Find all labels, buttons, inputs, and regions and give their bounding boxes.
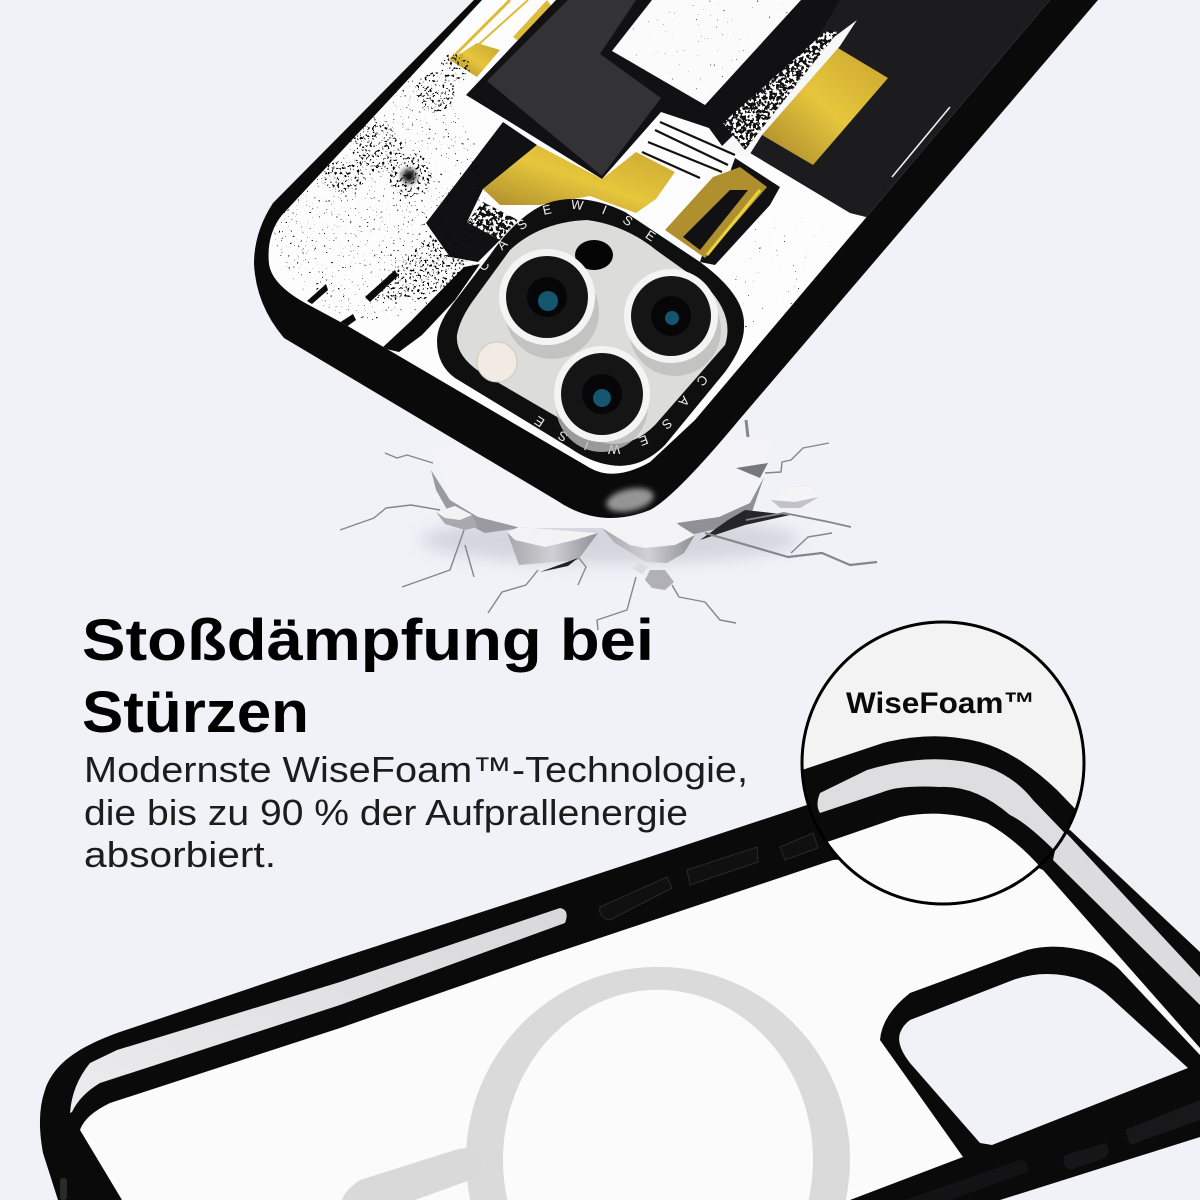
strip left	[70, 908, 567, 1113]
case bumper	[254, 0, 1098, 518]
white stroke	[718, 20, 857, 157]
gold patch top left	[450, 0, 553, 77]
camera cut-out window	[899, 974, 1188, 1145]
hatched brush strokes	[642, 122, 735, 178]
heading	[82, 608, 654, 745]
dark grey block	[487, 0, 661, 176]
heading: Stürzen	[82, 680, 309, 745]
camera plateau	[457, 220, 728, 444]
lens right	[624, 269, 721, 376]
circle outline	[802, 622, 1084, 904]
dense ink streak zone	[375, 235, 474, 300]
black panel upper right	[750, 0, 1060, 218]
body text: Modernste WiseFoam™-Technologie,	[84, 749, 748, 790]
cracked floor impact	[340, 420, 877, 630]
thin white scratch on black panel	[892, 107, 950, 177]
bright yellow stroke	[707, 190, 760, 255]
white speckle patch	[467, 202, 518, 240]
microphone hole	[575, 240, 613, 270]
crack lines	[340, 420, 877, 630]
gold patch lower	[665, 167, 767, 258]
body text	[84, 749, 748, 875]
frame lower right	[700, 158, 780, 265]
small rocks	[436, 485, 819, 590]
MagSafe ring	[466, 967, 850, 1200]
WiseFoam label: WiseFoam™	[846, 687, 1035, 720]
flash	[477, 342, 517, 382]
side buttons	[600, 833, 818, 920]
gold patch centre	[483, 145, 675, 213]
gloss highlight	[604, 484, 656, 516]
magnified case detail	[804, 736, 1075, 865]
lens bottom	[554, 346, 650, 452]
lower right buttons	[905, 1100, 1200, 1200]
printed face	[268, 0, 1050, 474]
lens top left	[499, 249, 599, 359]
debris chunk right	[602, 520, 695, 563]
strip right	[1053, 827, 1200, 1005]
phone with printed case	[254, 0, 1098, 518]
ring text top: CASEWISE	[479, 200, 656, 270]
speckled black brush stroke	[723, 30, 838, 150]
MagSafe bar	[342, 1148, 482, 1200]
black brush frame	[466, 0, 870, 179]
ink blot	[402, 169, 416, 183]
body text: absorbiert.	[84, 834, 276, 875]
ink streaks	[307, 264, 480, 352]
clear case	[40, 800, 1200, 1200]
interior clear back	[80, 850, 1200, 1200]
lower left port	[60, 1178, 67, 1200]
bumper frame	[40, 800, 1200, 1200]
debris chunk left	[507, 527, 598, 572]
body text: die bis zu 90 % der Aufprallenergie	[84, 792, 688, 833]
heading: Stoßdämpfung bei	[82, 608, 654, 673]
white panel	[612, 0, 801, 105]
speckle clusters	[265, 0, 860, 350]
camera cut-out frame	[880, 947, 1200, 1157]
ring text bottom: CASEWISE	[534, 376, 707, 454]
WiseFoam magnified circle	[802, 622, 1084, 920]
brush stripe in lower gold	[683, 190, 748, 250]
black brush band	[426, 122, 537, 262]
camera bump ring	[437, 199, 744, 466]
gold panel right	[762, 48, 888, 165]
